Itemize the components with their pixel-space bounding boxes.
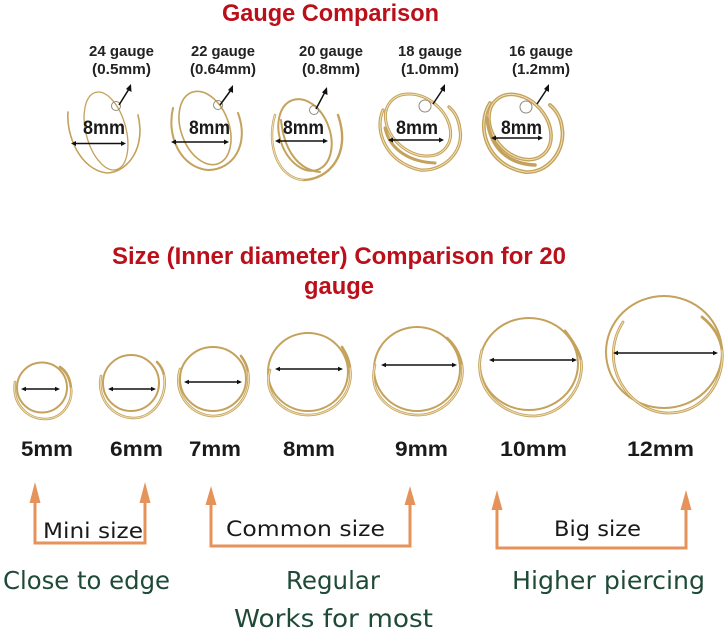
ring: 24 gauge bbox=[68, 87, 140, 175]
arrow: wire pointer bbox=[316, 87, 328, 109]
label: 8mm: 8mm bbox=[283, 118, 324, 139]
gauge item: 16 gauge bbox=[476, 43, 573, 172]
ring: 12mm bbox=[606, 296, 722, 413]
label: 1.0mm: (1.0mm) bbox=[401, 61, 459, 78]
label: big size: Big size bbox=[554, 517, 641, 541]
note: close to edge: Close to edge bbox=[3, 566, 170, 595]
label: 8mm: 8mm bbox=[189, 118, 230, 139]
ring: 20 gauge bbox=[269, 92, 342, 180]
label: 5mm: 5mm bbox=[21, 437, 73, 461]
ring: 8mm bbox=[268, 333, 351, 415]
label: 6mm: 6mm bbox=[110, 437, 163, 461]
measure arrow bbox=[388, 138, 444, 142]
gauge item: 22 gauge bbox=[169, 43, 256, 172]
ring: 9mm bbox=[373, 327, 462, 415]
ring: 18 gauge bbox=[373, 81, 463, 170]
label: 8mm: 8mm bbox=[83, 118, 125, 139]
bracket: big size bbox=[492, 490, 692, 548]
label: 8mm: 8mm bbox=[501, 118, 542, 139]
label: 8mm: 8mm bbox=[283, 437, 335, 461]
label: 10mm: 10mm bbox=[500, 437, 567, 461]
ring: 16 gauge bbox=[476, 82, 564, 172]
measure arrow bbox=[71, 141, 126, 146]
ring: 5mm bbox=[15, 362, 71, 419]
ring: 22 gauge bbox=[169, 84, 242, 172]
panel: gauge comparison rings bbox=[68, 43, 573, 180]
label: 1.2mm: (1.2mm) bbox=[512, 61, 570, 78]
label: 24 gauge: 24 gauge bbox=[89, 43, 154, 60]
note: higher piercing: Higher piercing bbox=[512, 566, 705, 595]
label: 16 gauge: 16 gauge bbox=[509, 43, 573, 60]
label: 0.64mm: (0.64mm) bbox=[190, 61, 256, 78]
arrow: wire pointer bbox=[119, 84, 132, 105]
label: 0.5mm: (0.5mm) bbox=[92, 61, 151, 78]
arrow: wire pointer bbox=[433, 84, 445, 104]
bracket: common size bbox=[206, 486, 416, 546]
label: mini size: Mini size bbox=[43, 519, 143, 543]
note: regular: Regular bbox=[286, 566, 381, 595]
arrow: wire pointer bbox=[537, 84, 549, 104]
ring: 10mm bbox=[480, 318, 582, 416]
gauge item: 24 gauge bbox=[68, 43, 154, 175]
bracket: mini size bbox=[30, 482, 150, 543]
label: common size: Common size bbox=[226, 517, 385, 541]
label: 12mm: 12mm bbox=[627, 437, 694, 461]
label: 18 gauge: 18 gauge bbox=[398, 43, 462, 60]
ring: 7mm bbox=[178, 347, 249, 416]
gauge item: 20 gauge bbox=[269, 43, 363, 180]
label: 20 gauge: 20 gauge bbox=[299, 43, 363, 60]
gauge item: 18 gauge bbox=[373, 43, 463, 170]
label: 8mm: 8mm bbox=[396, 118, 438, 139]
label: 7mm: 7mm bbox=[189, 437, 241, 461]
panel: size comparison rings bbox=[15, 296, 722, 461]
measure arrow bbox=[491, 136, 543, 140]
heading: size comparison: gauge bbox=[304, 273, 374, 300]
heading: size comparison bbox=[112, 243, 566, 300]
label: 22 gauge: 22 gauge bbox=[191, 43, 255, 60]
ring: 6mm bbox=[100, 355, 165, 418]
arrow: wire pointer bbox=[220, 85, 233, 105]
measure arrow bbox=[171, 140, 229, 144]
label: 9mm: 9mm bbox=[395, 437, 448, 461]
title: gauge comparison: Gauge Comparison bbox=[222, 0, 439, 27]
label: 0.8mm: (0.8mm) bbox=[302, 61, 360, 78]
measure arrow bbox=[275, 138, 328, 144]
heading: size comparison: Size (Inner diameter) Comparison for 20 bbox=[112, 243, 566, 270]
